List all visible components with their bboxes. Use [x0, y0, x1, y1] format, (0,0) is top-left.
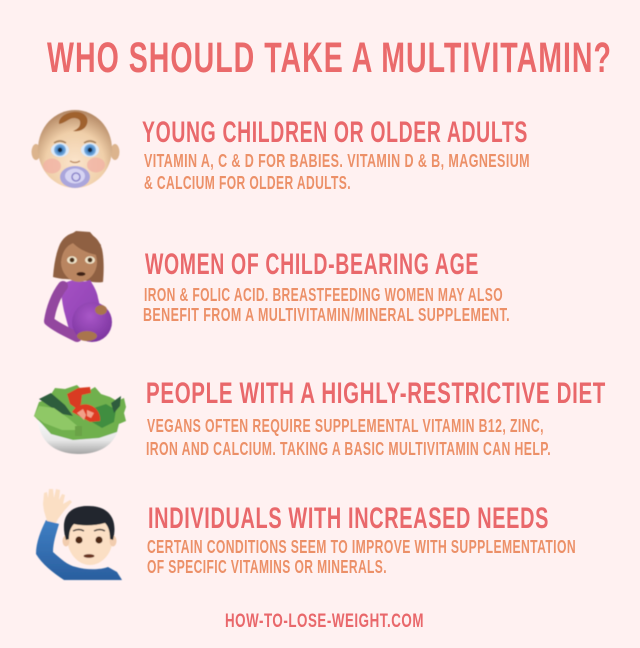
text: increased needs details	[147, 537, 576, 577]
icon: baby face with pacifier	[32, 110, 120, 188]
text: young children details: & CALCIUM FOR OLDER ADULTS.	[144, 173, 351, 193]
text: increased needs details: OF SPECIFIC VITAMINS OR MINERALS.	[147, 557, 387, 577]
text: women details	[143, 285, 510, 325]
icon: salad bowl	[34, 385, 126, 454]
text: restrictive diet details	[146, 416, 551, 459]
icon: man raising hand	[36, 489, 122, 580]
text: young children details	[144, 151, 530, 193]
footer: website: HOW-TO-LOSE-WEIGHT.COM	[225, 610, 424, 632]
icon: pregnant woman	[49, 231, 112, 342]
